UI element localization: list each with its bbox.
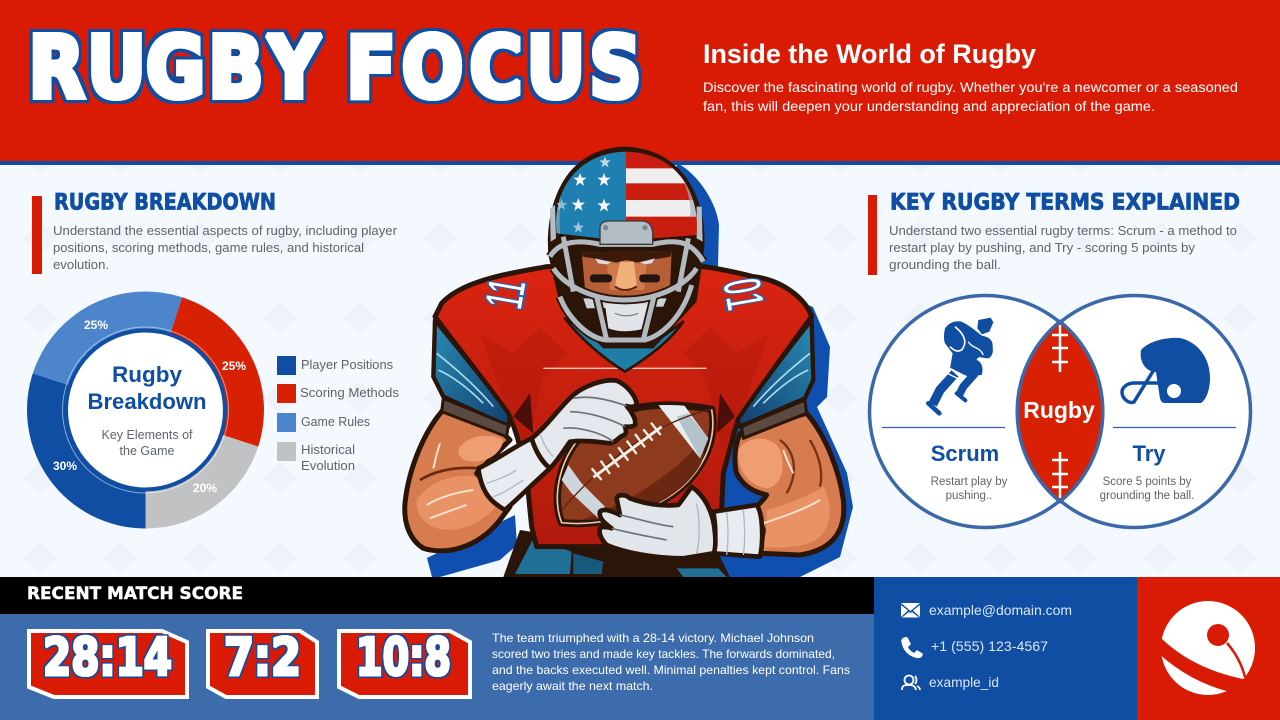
sleeve: left	[433, 320, 510, 427]
panel: contact details: example_id	[929, 674, 999, 690]
panel: key rugby terms intro	[868, 190, 1240, 275]
donut chart: Breakdown	[88, 389, 206, 414]
jersey numbers	[484, 278, 766, 312]
donut chart: 25%	[222, 359, 246, 373]
match summary text: eagerly await the next match.	[492, 679, 653, 693]
panel: rugby breakdown intro: RUGBY BREAKDOWN	[54, 190, 276, 216]
jersey numbers: 11	[474, 274, 539, 314]
donut chart: 20%	[193, 481, 217, 495]
armband: left	[442, 398, 508, 437]
panel: key rugby terms intro: grounding the ball.	[889, 257, 1001, 272]
title: Rugby Focus: RUGBY FOCUS	[29, 18, 641, 117]
icon: running player	[928, 318, 993, 413]
icon: envelope	[901, 603, 920, 618]
header band	[0, 0, 1280, 165]
donut chart: Rugby	[112, 362, 182, 387]
score box: 10:8: 10:8	[356, 628, 451, 688]
header intro text	[703, 39, 1238, 114]
jersey	[435, 267, 812, 547]
footer: match score band	[0, 577, 874, 720]
try text: grounding the ball.	[1100, 490, 1194, 502]
try text	[1100, 441, 1194, 502]
panel: key rugby terms intro: Understand two essential rugby terms: Scrum - a method to	[889, 223, 1237, 238]
scrum text: Restart play by	[931, 476, 1008, 488]
donut chart: 30%	[53, 459, 77, 473]
arm: left	[405, 407, 510, 551]
armband: right	[742, 400, 807, 438]
scrum text	[931, 441, 1008, 502]
header intro text: fan, this will deepen your understanding and appreciation of the game.	[703, 98, 1155, 114]
donut chart: the Game	[120, 444, 174, 458]
arm: right	[735, 413, 844, 555]
panel: rugby breakdown intro: positions, scoring methods, game rules, and historical	[53, 240, 364, 255]
match summary text	[492, 631, 850, 693]
panel: rugby breakdown intro: Understand the essential aspects of rugby, including player	[53, 223, 398, 238]
match summary text: scored two tries and made key tackles. The forwards dominated,	[492, 647, 835, 661]
header intro text: Inside the World of Rugby	[703, 39, 1036, 69]
panel: contact details	[874, 577, 1137, 720]
panel: contact details: +1 (555) 123-4567	[931, 638, 1048, 654]
panel: rugby breakdown intro	[32, 190, 398, 274]
try text: Try	[1132, 441, 1166, 466]
chart legend: Scoring Methods	[300, 385, 399, 400]
glove and wrap: left	[478, 380, 637, 510]
chart legend: Player Positions	[301, 357, 393, 372]
chart legend: Evolution	[301, 458, 355, 473]
try text: Score 5 points by	[1103, 476, 1192, 488]
chart legend: Game Rules	[301, 414, 370, 429]
scrum text: Scrum	[931, 441, 999, 466]
panel: rugby breakdown intro: evolution.	[53, 257, 109, 272]
scrum text: pushing..	[946, 490, 992, 502]
jersey numbers: 01	[710, 274, 775, 314]
header intro text: Discover the fascinating world of rugby. Whether you're a newcomer or a seasoned	[703, 79, 1238, 95]
donut chart: 25%	[84, 318, 108, 332]
icon: user group	[902, 676, 920, 690]
icon: helmet	[1122, 338, 1210, 403]
donut chart	[27, 292, 264, 528]
panel: key rugby terms intro: KEY RUGBY TERMS EXPLAINED	[890, 190, 1240, 216]
match summary text: The team triumphed with a 28-14 victory. Michael Johnson	[492, 631, 814, 645]
illustration: football player	[405, 147, 853, 577]
score box: 10:8	[339, 628, 470, 697]
venn diagram: scrum and try	[870, 296, 1250, 528]
venn diagram: scrum and try: Rugby	[1023, 397, 1095, 423]
football	[557, 395, 713, 524]
donut chart: Key Elements of	[101, 428, 193, 442]
chart legend	[277, 356, 399, 473]
score box: 7:2: 7:2	[224, 628, 301, 688]
score box: 28:14: 28:14	[43, 628, 172, 688]
match summary text: and the backs executed well. Minimal penalties kept control. Fans	[492, 663, 850, 677]
panel: key rugby terms intro: restart play by pushing, and Try - scoring 5 points by	[889, 240, 1195, 255]
footer: match score band: RECENT MATCH SCORE	[27, 584, 243, 604]
panel: contact details: example@domain.com	[929, 602, 1072, 618]
chart legend: Historical	[301, 442, 355, 457]
sleeve: right	[737, 320, 813, 427]
icon: phone	[902, 638, 922, 657]
legs	[503, 530, 730, 577]
panel: logo	[1137, 577, 1280, 720]
helmet and face	[548, 147, 705, 372]
glove and wrap: right	[600, 487, 762, 558]
